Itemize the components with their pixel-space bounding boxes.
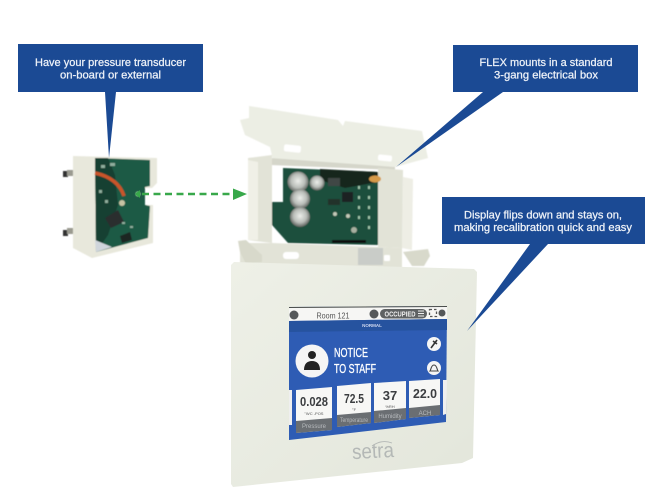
notice message: NOTICE <box>334 345 368 360</box>
card: ACH: 22.0 <box>413 386 437 401</box>
card: pressure <box>296 387 332 433</box>
card: pressure: Pressure <box>302 424 327 430</box>
transducer circuit board <box>95 158 150 252</box>
main circuit board <box>272 168 381 245</box>
icon: staff avatar <box>296 344 328 378</box>
right hinge clip <box>403 249 430 266</box>
card: pressure: 0.028 <box>300 394 328 409</box>
card: pressure: "WC -POS <box>305 411 324 416</box>
card: humidity <box>374 381 406 423</box>
bottom hinge shelf <box>240 243 402 268</box>
icon: upper pressure port <box>63 170 74 177</box>
main FLEX enclosure <box>238 106 430 268</box>
status label: NORMAL <box>362 323 382 328</box>
card: temperature: 72.5 <box>344 391 364 406</box>
callout: display flips down: making recalibration quick and easy <box>454 222 633 234</box>
callout: electrical box: 3-gang electrical box <box>494 70 598 82</box>
screen header bar: Room 121 <box>316 312 350 320</box>
display faceplate <box>231 262 477 487</box>
callout: pressure transducer: on-board or external <box>60 70 161 82</box>
capacitors <box>288 172 324 227</box>
external transducer module <box>63 156 157 258</box>
card: humidity: %RH <box>385 404 395 409</box>
callout: pressure transducer <box>18 44 203 158</box>
card: humidity: 37 <box>383 388 397 403</box>
touchscreen <box>289 306 447 440</box>
dashed arrow to enclosure <box>135 188 247 200</box>
icon: lower pressure port <box>63 228 74 236</box>
icon: alarm button <box>427 361 441 375</box>
transducer housing <box>73 156 157 258</box>
notice message <box>334 345 376 376</box>
partial left card <box>289 390 292 425</box>
callout: electrical box: FLEX mounts in a standard <box>480 57 612 69</box>
card: ACH: ACH <box>419 411 431 417</box>
left hinge clip <box>238 240 262 264</box>
icon: maintenance button <box>427 337 441 351</box>
right enclosure wall <box>378 168 413 250</box>
callout: pressure transducer: Have your pressure transducer <box>35 57 186 69</box>
callout: display flips down <box>442 197 645 331</box>
top mounting flap <box>240 106 428 170</box>
card: temperature <box>337 383 371 427</box>
callout: electrical box <box>396 45 638 167</box>
card: ACH <box>409 379 440 418</box>
callout: display flips down: Display flips down and stays on, <box>464 210 622 222</box>
screen header bar <box>290 309 446 320</box>
card: temperature: Temperature <box>340 418 369 424</box>
partial right card <box>443 380 447 415</box>
left enclosure wall <box>248 155 272 243</box>
card: humidity: Humidity <box>378 414 402 420</box>
notice message: TO STAFF <box>334 361 376 376</box>
setra logo: setra <box>351 439 395 464</box>
screen header bar: OCCUPIED <box>384 312 416 318</box>
card: temperature: °F <box>352 407 357 412</box>
